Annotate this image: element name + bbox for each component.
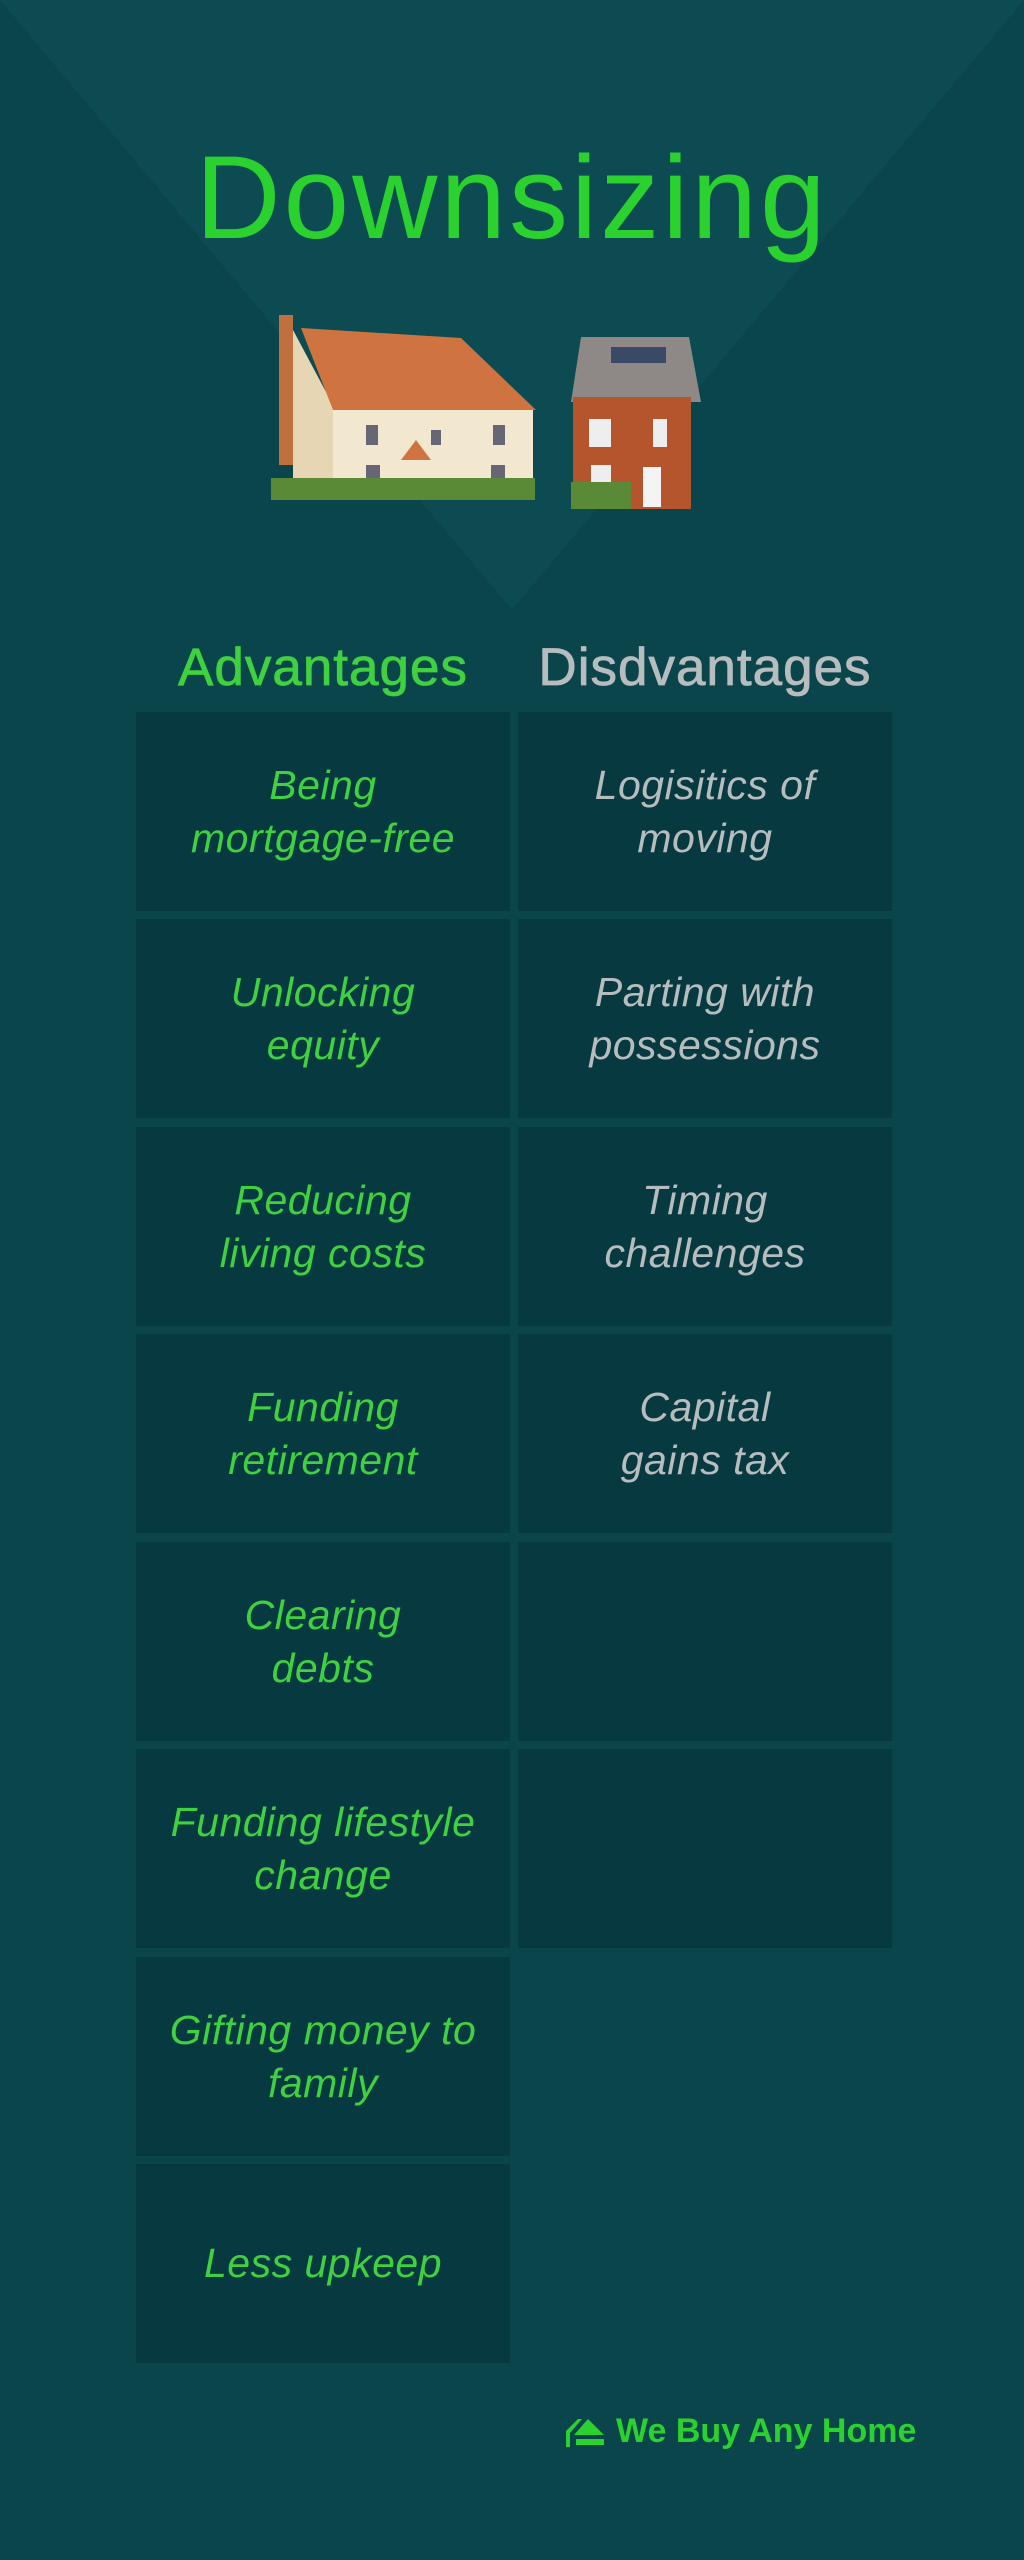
cell: timing bbox=[518, 1127, 892, 1326]
cell: tax: Capital bbox=[639, 1384, 771, 1430]
cell: logistics: moving bbox=[637, 814, 773, 860]
icon: large house bbox=[271, 315, 536, 500]
cell: tax: gains tax bbox=[621, 1436, 789, 1482]
cell: retirement bbox=[136, 1334, 510, 1533]
cell: equity: equity bbox=[267, 1022, 379, 1068]
cell: living costs: living costs bbox=[220, 1230, 426, 1276]
cell: logistics bbox=[518, 712, 892, 911]
disadvantages column bbox=[518, 712, 892, 1948]
icon: small house bbox=[571, 337, 701, 509]
title: Downsizing bbox=[195, 132, 829, 264]
cell: gifting: family bbox=[268, 2060, 378, 2106]
cell: gifting bbox=[136, 1957, 510, 2156]
cell: debts: Clearing bbox=[245, 1592, 401, 1638]
cell: equity bbox=[136, 919, 510, 1118]
heading: advantages: Advantages bbox=[178, 638, 468, 697]
cell: mortgage-free: Being bbox=[269, 762, 377, 808]
cell: tax bbox=[518, 1334, 892, 1533]
cell: equity: Unlocking bbox=[231, 968, 415, 1014]
cell: upkeep: Less upkeep bbox=[204, 2240, 442, 2286]
cell: retirement: retirement bbox=[228, 1436, 418, 1482]
heading: disadvantages: Disdvantages bbox=[538, 638, 872, 697]
cell: lifestyle: Funding lifestyle bbox=[171, 1798, 475, 1844]
logo: We Buy Any Home bbox=[616, 2412, 916, 2450]
cell: gifting: Gifting money to bbox=[170, 2006, 476, 2052]
cell: upkeep bbox=[136, 2164, 510, 2363]
cell: possessions: possessions bbox=[589, 1022, 821, 1068]
cell: timing: challenges bbox=[604, 1230, 806, 1276]
cell: debts bbox=[136, 1542, 510, 1741]
cell: living costs: Reducing bbox=[234, 1176, 412, 1222]
cell: mortgage-free bbox=[136, 712, 510, 911]
cell: empty 2 bbox=[518, 1749, 892, 1948]
cell: debts: debts bbox=[272, 1644, 374, 1690]
cell: mortgage-free: mortgage-free bbox=[191, 814, 455, 860]
cell: retirement: Funding bbox=[247, 1384, 399, 1430]
cell: possessions: Parting with bbox=[595, 968, 815, 1014]
cell: timing: Timing bbox=[642, 1176, 768, 1222]
cell: logistics: Logisitics of bbox=[595, 762, 815, 808]
cell: possessions bbox=[518, 919, 892, 1118]
cell: lifestyle: change bbox=[254, 1852, 392, 1898]
advantages column bbox=[136, 712, 510, 2363]
icon: logo house bbox=[566, 2419, 604, 2447]
cell: lifestyle bbox=[136, 1749, 510, 1948]
cell: living costs bbox=[136, 1127, 510, 1326]
cell: empty bbox=[518, 1542, 892, 1741]
